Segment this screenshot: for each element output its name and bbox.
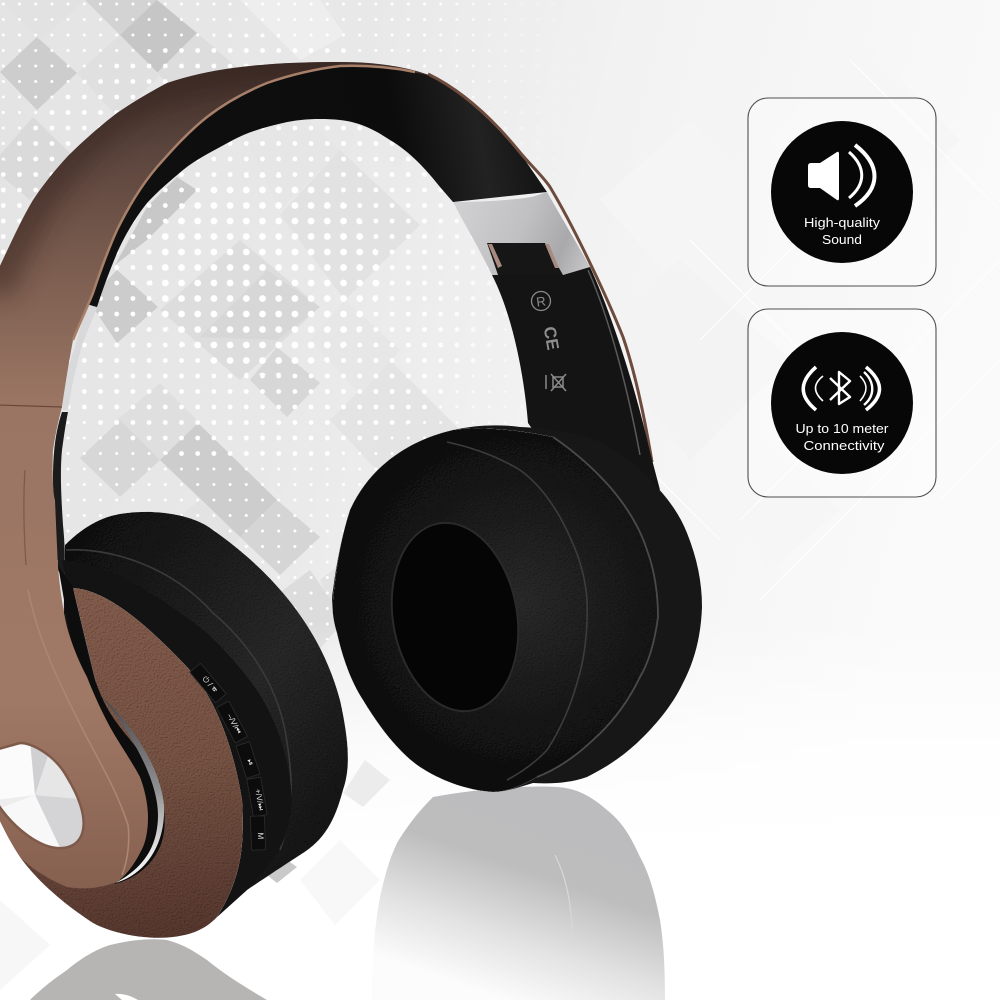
button labels: ⏯ — [245, 758, 256, 767]
card: connectivity — [748, 309, 936, 497]
icon: speaker — [808, 145, 874, 206]
black ring — [62, 560, 292, 917]
ear hole — [377, 513, 533, 721]
black badge — [771, 332, 913, 474]
arm crease — [24, 470, 26, 565]
button labels: ⏻ / ☎ — [200, 674, 220, 695]
reflection: left ear cup — [30, 939, 267, 1000]
card: high-quality sound — [748, 98, 936, 286]
silver slider on right — [453, 192, 590, 275]
cushion seam — [66, 550, 291, 850]
CE mark: CE — [540, 325, 563, 352]
outer shell — [332, 425, 702, 792]
brown highlight rim — [73, 66, 415, 340]
left stem black strip — [53, 412, 68, 585]
background dot grid — [0, 2, 506, 640]
faint diagonal light lines — [600, 60, 1000, 600]
badge label: Sound — [822, 233, 862, 247]
badge label — [796, 422, 888, 453]
button labels: –/V/⏮ — [225, 712, 243, 735]
silver insert on left stem — [63, 305, 97, 410]
icon: bluetooth waves — [803, 367, 880, 410]
brown headband and stem face — [0, 62, 432, 570]
background diamonds — [0, 0, 960, 660]
left cushion — [60, 512, 348, 917]
disc rim — [0, 743, 84, 848]
dark gap between arm and leather — [58, 565, 165, 884]
lower white fade — [0, 620, 1000, 850]
metal disc — [0, 744, 82, 847]
cushion seam outer — [537, 437, 658, 777]
stem seam — [0, 405, 62, 407]
recycling bin mark — [546, 374, 566, 391]
badge label — [804, 216, 881, 247]
silver crescent — [100, 695, 164, 883]
headband black underside — [86, 65, 547, 307]
headband outer brown edge line — [428, 74, 652, 462]
badge label: High-quality — [804, 216, 881, 230]
slider window — [487, 243, 563, 275]
dark shading along outer edge — [0, 55, 340, 290]
cushion seam inner — [447, 442, 587, 780]
copper slivers in window — [488, 244, 559, 268]
button labels: +/V/⏭ — [253, 788, 266, 811]
lower faint diamonds — [0, 760, 390, 990]
cushion — [333, 428, 658, 792]
leather plate — [20, 588, 243, 938]
headband — [0, 55, 652, 585]
button labels: M — [256, 832, 265, 840]
left ear cup — [20, 512, 348, 938]
right stem with marks — [492, 267, 660, 490]
registered mark — [532, 292, 550, 310]
arm light band — [28, 590, 129, 875]
lower arm over ear cup — [0, 470, 148, 888]
reflection: right ear cup — [372, 787, 665, 1000]
badge label: Connectivity — [804, 439, 885, 453]
control buttons — [190, 663, 267, 850]
registered mark: R — [535, 293, 547, 310]
button labels — [200, 674, 266, 840]
black badge — [771, 121, 913, 263]
badge label: Up to 10 meter — [796, 422, 888, 436]
right ear cup — [332, 425, 702, 792]
